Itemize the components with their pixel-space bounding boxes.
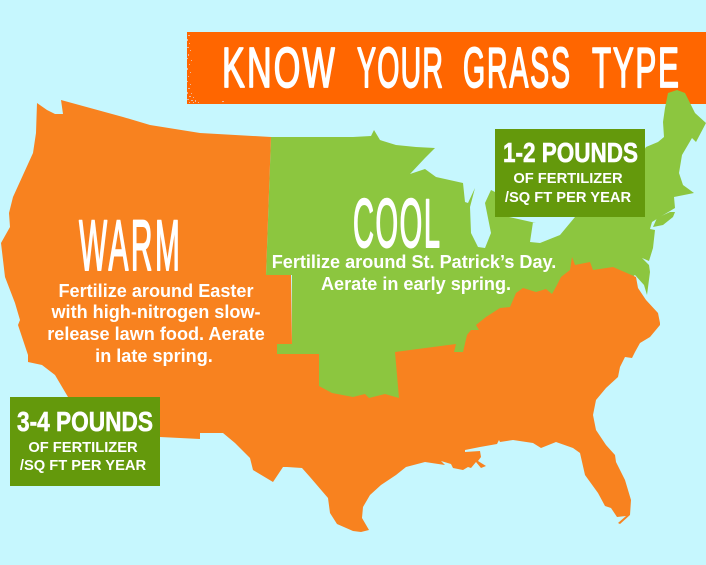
title: TYPE	[592, 35, 679, 99]
map detail: Long Island	[653, 212, 675, 227]
cool description: Fertilize around St. Patrick’s Day.	[272, 252, 556, 272]
warm description: in late spring.	[95, 346, 213, 366]
title	[222, 35, 679, 100]
title: KNOW	[222, 35, 335, 99]
title: GRASS	[463, 35, 570, 100]
title banner	[187, 32, 706, 104]
callout: warm fertilizer amount: 3-4 POUNDS	[17, 406, 153, 437]
callout: cool fertilizer amount: 1-2 POUNDS	[503, 137, 638, 168]
warm description	[47, 281, 265, 366]
callout: warm fertilizer amount: OF FERTILIZER	[28, 440, 138, 456]
callout: warm fertilizer amount: /SQ FT PER YEAR	[20, 458, 147, 474]
warm description: with high-nitrogen slow-	[50, 302, 261, 322]
warm description: Fertilize around Easter	[58, 281, 254, 301]
map region: cool grass states	[266, 90, 706, 400]
callout: cool fertilizer amount: OF FERTILIZER	[513, 171, 623, 187]
callout: warm fertilizer amount	[10, 397, 160, 486]
cool description: Aerate in early spring.	[321, 274, 511, 294]
title: YOUR	[357, 35, 443, 100]
callout: cool fertilizer amount	[495, 129, 645, 217]
map region: warm grass states	[1, 100, 660, 532]
cool description	[272, 252, 556, 294]
warm heading: WARM	[79, 206, 180, 286]
callout: cool fertilizer amount: /SQ FT PER YEAR	[505, 190, 632, 206]
cool heading: COOL	[353, 186, 440, 263]
warm description: release lawn food. Aerate	[47, 324, 265, 344]
